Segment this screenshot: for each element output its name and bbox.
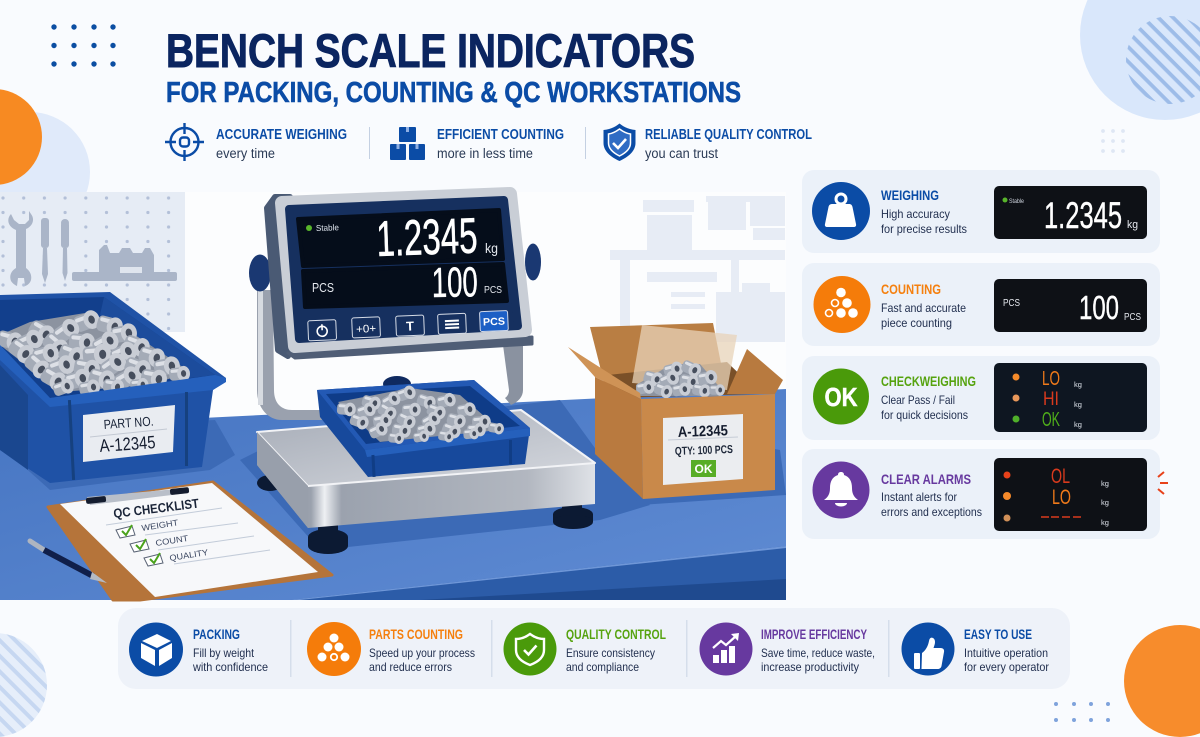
- panel: clear alarms: Instant alerts for: [881, 490, 957, 504]
- item: improve efficiency: Save time, reduce waste,: [761, 646, 875, 660]
- qc clipboard: [48, 482, 332, 600]
- feature: efficient counting: EFFICIENT COUNTING: [437, 127, 564, 143]
- decoration: top-right shapes: [1080, 0, 1200, 153]
- panel: checkweighing: CHECKWEIGHING: [881, 373, 976, 389]
- display: weight: 1.2345: [1044, 195, 1122, 236]
- parts pile: [0, 308, 191, 398]
- panel: weighing: for precise results: [881, 222, 967, 236]
- item: easy to use: [902, 622, 1049, 676]
- panel: clear alarms: [802, 449, 1168, 539]
- item: improve efficiency: IMPROVE EFFICIENCY: [761, 626, 867, 642]
- stable lamp: [306, 225, 312, 231]
- weight reading: 1.2345: [375, 208, 478, 267]
- icon: parts pile: [307, 622, 361, 676]
- icon: shield: [504, 622, 556, 676]
- decoration: bottom-left striped circle: [0, 633, 47, 737]
- item: packing: with confidence: [192, 660, 268, 674]
- panel: weighing: [802, 170, 1160, 253]
- icon: bell: [812, 462, 870, 518]
- icon: ok: OK: [824, 382, 858, 412]
- scale feet: [257, 475, 593, 554]
- control buttons: [308, 310, 508, 341]
- feature: reliable quality control: [604, 124, 812, 161]
- item: packing: PACKING: [193, 626, 240, 642]
- panel: counting: COUNTING: [881, 281, 941, 297]
- item: quality control: QUALITY CONTROL: [566, 626, 666, 642]
- scene background: [0, 192, 786, 600]
- cardboard box: [568, 323, 783, 499]
- bench scale: [249, 194, 595, 554]
- qc clipboard: QUALITY: [169, 547, 209, 563]
- icon: weight: [812, 182, 870, 240]
- clip: [86, 487, 189, 505]
- parts bin: [0, 292, 226, 483]
- checklist text: QC CHECKLIST: [113, 496, 200, 521]
- divider: [369, 127, 370, 159]
- item: packing: Fill by weight: [193, 646, 255, 660]
- item: easy to use: EASY TO USE: [964, 626, 1032, 642]
- bin label: [83, 405, 175, 462]
- panel: counting: Fast and accurate: [881, 301, 966, 315]
- panel: clear alarms: errors and exceptions: [881, 505, 982, 519]
- display: check results: kg: [1074, 420, 1082, 429]
- display: alarms: kg: [1101, 518, 1109, 527]
- qc clipboard: COUNT: [155, 533, 189, 548]
- tray parts: [337, 384, 505, 444]
- item: parts counting: Speed up your process: [369, 646, 475, 660]
- display: check results: kg: [1074, 380, 1082, 389]
- plastic bag with parts: [632, 325, 737, 400]
- icon: thumbs up: [902, 622, 954, 676]
- panel: counting: piece counting: [881, 316, 952, 330]
- item: packing: [129, 622, 268, 676]
- knobs: [249, 254, 271, 292]
- display: alarms: kg: [1101, 498, 1109, 507]
- item: quality control: Ensure consistency: [566, 646, 655, 660]
- feature: reliable quality control: you can trust: [645, 146, 718, 161]
- item: parts counting: [307, 622, 475, 676]
- indicator head: 100: [431, 258, 478, 306]
- box label: QTY: 100 PCS: [675, 444, 733, 458]
- feature: accurate weighing: every time: [216, 146, 275, 161]
- control buttons: T: [406, 318, 414, 334]
- feature: efficient counting: [390, 127, 564, 161]
- panel: weighing: High accuracy: [881, 207, 950, 221]
- indicator head: [249, 194, 541, 358]
- box label: OK: [694, 462, 713, 476]
- strip: applications: [118, 608, 1070, 689]
- tray back knob: [383, 376, 411, 392]
- display: count: PCS: [1003, 298, 1020, 309]
- bezel: [267, 197, 290, 356]
- item: parts counting: and reduce errors: [369, 660, 452, 674]
- feature: accurate weighing: [165, 123, 347, 161]
- pegboard with tools: [0, 192, 185, 332]
- panel: checkweighing: Clear Pass / Fail: [881, 393, 955, 407]
- indicator head: Stable: [316, 222, 339, 233]
- item: quality control: [504, 622, 666, 676]
- display: check results: OK: [1042, 409, 1060, 431]
- icon: parts pile: [814, 276, 870, 333]
- display: check results: kg: [1074, 400, 1082, 409]
- main screen: [298, 210, 503, 266]
- scale platform: [257, 432, 595, 528]
- tray: [317, 380, 530, 477]
- control buttons: +0+: [356, 323, 376, 336]
- scale stand: [257, 290, 523, 420]
- feature: accurate weighing: ACCURATE WEIGHING: [216, 127, 347, 143]
- icon: box: [129, 622, 183, 676]
- decoration: bottom-right shapes: [1054, 625, 1200, 737]
- bin label: PART NO.: [103, 414, 154, 432]
- decoration: top-left shapes: [0, 24, 116, 232]
- qc clipboard: WEIGHT: [141, 517, 179, 533]
- illustration: workstation scene: [0, 192, 786, 600]
- display: check results: [994, 363, 1147, 432]
- icon: shield: [604, 124, 636, 161]
- feature: efficient counting: more in less time: [437, 146, 533, 161]
- display: weight: Stable: [1009, 198, 1024, 205]
- item: quality control: and compliance: [566, 660, 639, 674]
- display: alarms: [994, 458, 1147, 531]
- panel: checkweighing: for quick decisions: [881, 408, 968, 422]
- display: check results: LO: [1042, 368, 1060, 390]
- table: [0, 389, 786, 600]
- display: alarms: LO: [1052, 486, 1071, 509]
- item: improve efficiency: increase productivity: [761, 660, 859, 674]
- divider: [585, 127, 586, 159]
- count reading: PCS: [312, 280, 334, 295]
- display: alarms: kg: [1101, 479, 1109, 488]
- display: count: [994, 279, 1147, 332]
- display: count: 100: [1079, 289, 1119, 326]
- panel: counting: [802, 263, 1160, 346]
- box label: [663, 414, 743, 485]
- icon: target: [165, 123, 204, 161]
- display: check results: HI: [1043, 389, 1059, 410]
- table shadows: [0, 400, 786, 550]
- pen: [30, 541, 107, 583]
- panel: clear alarms: CLEAR ALARMS: [881, 471, 971, 487]
- icon: stacked boxes: [390, 127, 425, 160]
- control buttons: PCS: [483, 316, 505, 329]
- title: BENCH SCALE INDICATORS: [166, 24, 695, 77]
- panel: checkweighing: [802, 356, 1160, 440]
- alarm ticks: [1158, 472, 1168, 494]
- item: easy to use: for every operator: [964, 660, 1049, 674]
- background workshop shelves: [610, 196, 785, 342]
- feature: reliable quality control: RELIABLE QUALITY CONTROL: [645, 127, 812, 143]
- bin label: A-12345: [99, 432, 156, 456]
- indicator head: PCS: [484, 285, 502, 296]
- panel: weighing: WEIGHING: [881, 187, 939, 203]
- display: weight: kg: [1127, 219, 1138, 231]
- box label: A-12345: [678, 422, 728, 441]
- item: improve efficiency: [700, 622, 875, 676]
- check boxes: [116, 525, 163, 566]
- display: alarms: OL: [1051, 465, 1070, 488]
- count screen: [303, 264, 507, 307]
- item: easy to use: Intuitive operation: [964, 646, 1048, 660]
- item: parts counting: PARTS COUNTING: [369, 626, 463, 642]
- display: weight: [994, 186, 1147, 239]
- display: count: PCS: [1124, 312, 1141, 323]
- icon: growth chart: [700, 622, 752, 676]
- subtitle: FOR PACKING, COUNTING & QC WORKSTATIONS: [166, 77, 741, 109]
- indicator head: kg: [485, 240, 498, 256]
- icon: ok: [813, 368, 869, 424]
